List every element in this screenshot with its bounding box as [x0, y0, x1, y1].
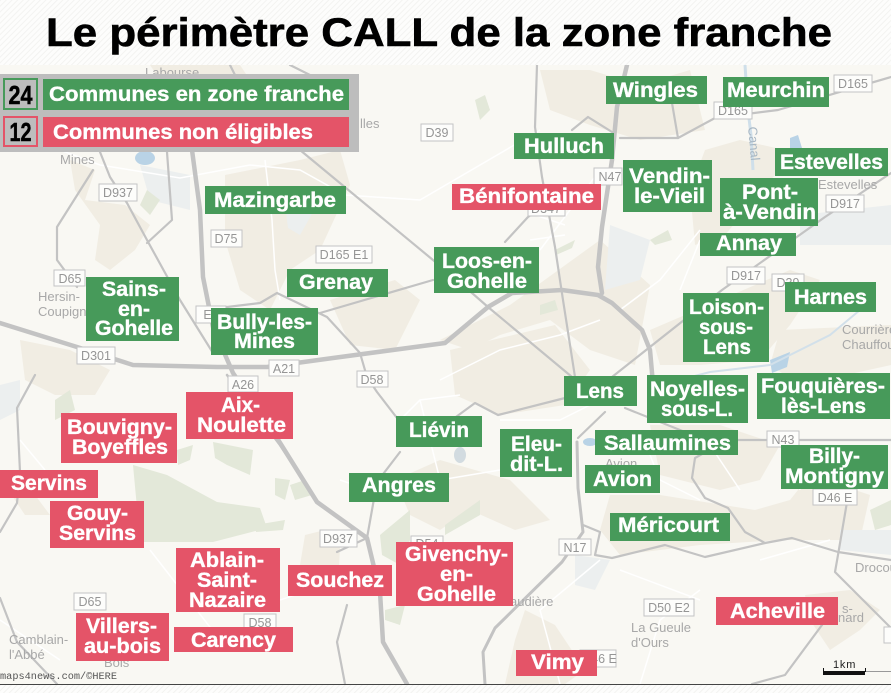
label: Acheville: Acheville [730, 600, 825, 623]
road shields: A26 [232, 378, 254, 392]
label: Angres [349, 473, 449, 502]
map place names: Labourse [145, 65, 199, 80]
label: Loison-sous-Lens: Lens [703, 336, 751, 359]
label: Ablain-Saint-Nazaire: Ablain- [190, 549, 264, 572]
road shields: D165 E1 [320, 248, 368, 262]
label: Carency: Carency [191, 629, 276, 652]
label: Bouvigny-Boyeffles [61, 413, 177, 463]
label: Gouy-Servins [50, 501, 144, 548]
map place names: La Gueule [631, 620, 691, 635]
road shields: D937 [103, 186, 133, 200]
label: Pont-à-Vendin: à-Vendin [723, 201, 816, 224]
label: Loison-sous-Lens: sous- [699, 316, 753, 339]
map place names: s- [842, 601, 853, 616]
label: Grenay [287, 269, 388, 297]
road shields: D46 E [818, 491, 852, 505]
credit: maps4news.com/©HERE [0, 671, 117, 683]
map place names: l'Abbé [9, 647, 45, 662]
label: Ablain-Saint-Nazaire: Saint- [197, 569, 257, 592]
road shields: E1 [203, 308, 219, 322]
road shields: D917 [830, 197, 860, 211]
road shields: D917 [731, 269, 761, 283]
label: Wingles: Wingles [613, 79, 698, 102]
label: Fouquières-lès-Lens: lès-Lens [781, 395, 866, 418]
map place names: Camblain- [9, 632, 68, 647]
road shields: D65 [79, 595, 102, 609]
label: Méricourt [610, 513, 730, 541]
label: Loison-sous-Lens: Loison- [689, 296, 764, 319]
label: Meurchin [723, 77, 829, 107]
legend bar: communes en zone franche: Communes en zone franche [49, 83, 344, 106]
map frame bottom line [0, 684, 891, 685]
label: Lens: Lens [576, 380, 624, 403]
map place names: Hersin- [38, 289, 80, 304]
label: Annay [700, 232, 796, 256]
label: Loos-en-Gohelle: Loos-en- [442, 250, 532, 273]
label: Eleu-dit-L.: dit-L. [510, 453, 563, 476]
label: Loos-en-Gohelle [434, 247, 539, 293]
legend panel [0, 74, 359, 152]
label: Bouvigny-Boyeffles: Bouvigny- [67, 416, 172, 439]
label: Bully-les-Mines: Bully-les- [217, 311, 312, 334]
label: Estevelles: Estevelles [780, 151, 883, 174]
legend bar: communes en zone franche [43, 79, 349, 110]
label: Bully-les-Mines [211, 308, 318, 355]
road shields: D301 [81, 349, 111, 363]
map place names: Avion [605, 456, 637, 471]
label: Harnes: Harnes [794, 286, 867, 309]
road shields: D347 [531, 202, 561, 216]
road shields: D39 [426, 126, 449, 140]
label: Sains-en-Gohelle [86, 277, 179, 341]
label: Hulluch: Hulluch [524, 135, 604, 158]
label: Gouy-Servins: Gouy- [67, 502, 128, 525]
label: Sains-en-Gohelle: Sains- [102, 278, 166, 301]
road shields: D165 [838, 77, 868, 91]
label: Aix-Noulette: Aix- [221, 394, 260, 417]
label: Mazingarbe [205, 186, 346, 214]
road shields: N17 [564, 541, 587, 555]
scale bar [823, 659, 891, 675]
map place names: d'Ours [631, 635, 669, 650]
label: Servins [0, 470, 98, 498]
label: Bully-les-Mines: Mines [234, 330, 295, 353]
label: Billy-Montigny [781, 445, 888, 489]
map place names: lles [360, 116, 380, 131]
label: Vendin-le-Vieil [623, 160, 712, 212]
label: Meurchin: Meurchin [727, 79, 825, 102]
label: Fouquières-lès-Lens: Fouquières- [761, 375, 885, 398]
label: Mazingarbe: Mazingarbe [214, 189, 336, 212]
label: Servins: Servins [11, 472, 87, 495]
road shields: N43 [772, 433, 795, 447]
label: Acheville [716, 597, 838, 625]
road shields: D58 [361, 373, 384, 387]
label: Wingles [606, 76, 707, 104]
label: Givenchy-en-Gohelle: Givenchy- [405, 543, 508, 566]
legend bar: communes non éligibles [43, 117, 349, 147]
label: Harnes [785, 282, 876, 312]
label: Sains-en-Gohelle: Gohelle [95, 317, 173, 340]
label: Hulluch [514, 133, 614, 159]
road shields: D58 [249, 616, 272, 630]
road shields: 46 E [591, 652, 617, 666]
label: Grenay: Grenay [299, 271, 373, 294]
map place names: Coupigny [38, 304, 93, 319]
road shields: A21 [273, 362, 295, 376]
label: Méricourt: Méricourt [618, 514, 719, 537]
label: Vendin-le-Vieil: le-Vieil [634, 185, 705, 208]
label: Sallaumines: Sallaumines [604, 432, 731, 455]
legend count: 12 communes: 12 [10, 117, 32, 147]
label: Vimy: Vimy [531, 651, 584, 674]
label: Givenchy-en-Gohelle: en- [440, 563, 473, 586]
label: Villers-au-bois: Villers- [86, 615, 157, 638]
label: Aix-Noulette [186, 392, 293, 439]
label: Bouvigny-Boyeffles: Boyeffles [72, 436, 168, 459]
map place names: Bois [104, 655, 130, 670]
label: Souchez [288, 565, 392, 596]
road shields: D65 [59, 272, 82, 286]
label: Vendin-le-Vieil: Vendin- [629, 165, 710, 188]
title: Le périmètre CALL de la zone franche [46, 11, 832, 55]
label: Avion: Avion [593, 468, 652, 491]
map place names: nard [838, 610, 864, 625]
label: Pont-à-Vendin [720, 178, 818, 226]
scale bar: 1km [833, 659, 856, 671]
road shields: D50 E2 [648, 601, 690, 615]
label: Angres: Angres [362, 474, 436, 497]
label: Bénifontaine: Bénifontaine [459, 185, 594, 208]
label: Loos-en-Gohelle: Gohelle [447, 270, 527, 293]
label: Vimy [516, 650, 597, 676]
road shields: N47 [599, 170, 622, 184]
map place names: Estevelles [818, 177, 878, 192]
label: Villers-au-bois: au-bois [84, 635, 161, 658]
label: Eleu-dit-L.: Eleu- [511, 433, 562, 456]
road shields: D165 [718, 104, 748, 118]
road shields: D937 [323, 532, 353, 546]
label: Ablain-Saint-Nazaire: Nazaire [189, 589, 266, 612]
label: Gouy-Servins: Servins [59, 522, 136, 545]
legend count: 24 communes: 24 [8, 80, 33, 110]
label: Noyelles-sous-L.: Noyelles- [650, 378, 745, 401]
canal label: Canal [745, 126, 763, 161]
label: Sains-en-Gohelle: en- [118, 298, 150, 321]
label: Liévin [396, 416, 482, 447]
road shields: D54 [416, 537, 439, 551]
label: Lens [564, 376, 637, 406]
label: Aix-Noulette: Noulette [197, 414, 286, 437]
label: Carency [174, 627, 293, 652]
label: Billy-Montigny: Billy- [809, 445, 860, 468]
legend bar: communes non éligibles: Communes non éligibles [53, 121, 313, 144]
label: Noyelles-sous-L.: sous-L. [661, 398, 733, 421]
label: Billy-Montigny: Montigny [785, 465, 884, 488]
label: Fouquières-lès-Lens [757, 373, 890, 419]
map place names: Mines [60, 152, 95, 167]
label: Liévin: Liévin [409, 419, 469, 442]
label: Givenchy-en-Gohelle: Gohelle [417, 583, 496, 606]
label: Pont-à-Vendin: Pont- [742, 181, 798, 204]
road shields: D39 [777, 276, 800, 290]
label: Souchez: Souchez [296, 569, 384, 592]
label: Eleu-dit-L. [500, 429, 572, 477]
label: Villers-au-bois [76, 613, 169, 661]
label: Avion [585, 465, 660, 493]
label: Loison-sous-Lens [683, 293, 769, 362]
label: Annay: Annay [716, 232, 782, 255]
label: Givenchy-en-Gohelle [396, 542, 513, 606]
label: Noyelles-sous-L. [647, 375, 748, 423]
map place names: audière [510, 594, 553, 609]
label: Ablain-Saint-Nazaire [176, 548, 280, 612]
road shields: D75 [215, 232, 238, 246]
